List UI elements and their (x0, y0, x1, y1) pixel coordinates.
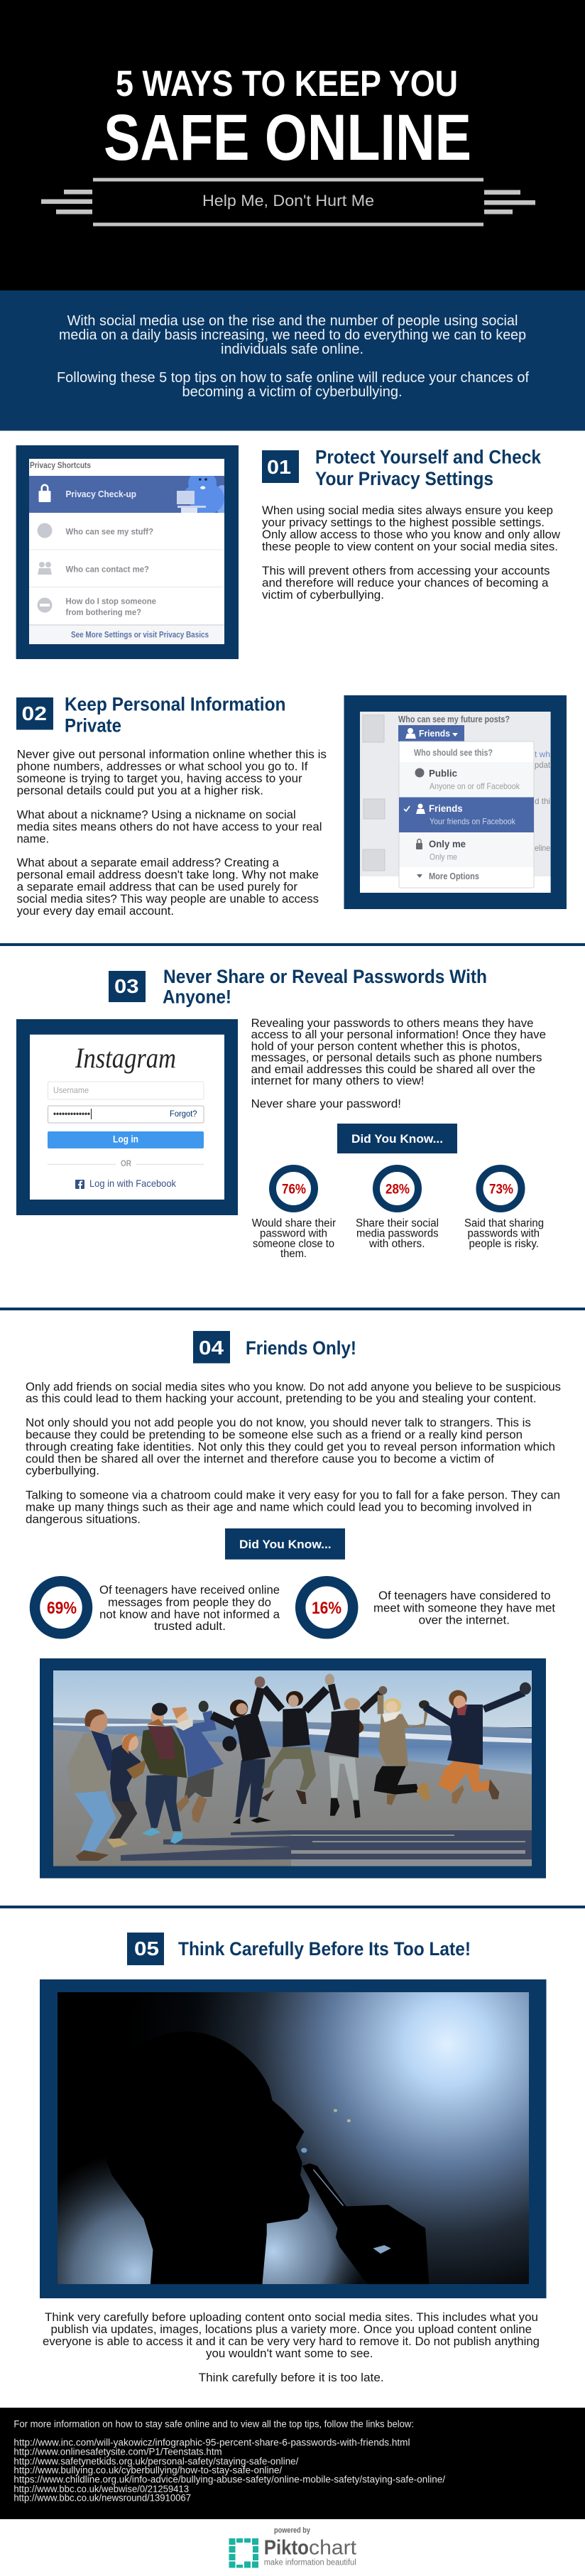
number badge 02: 02 (21, 702, 47, 724)
heading: tip 02: Private (65, 715, 121, 737)
jumping group left half (67, 1676, 282, 1861)
stat: 69%: messages from people they do (108, 1595, 271, 1609)
heading: tip 03 (163, 966, 487, 1008)
title line 2: SAFE ONLINE (104, 102, 471, 174)
did you know label: Did You Know... (351, 1132, 443, 1146)
body text: tip 04: dangerous situations. (26, 1512, 141, 1526)
heading: tip 05: Think Carefully Before Its Too Late! (178, 1938, 471, 1960)
body text: tip 04: because they could be pretending to be someone else such as a friend or a really kind person (26, 1428, 523, 1442)
header banner (0, 0, 585, 290)
body text: tip 02: social media sites? This way people are unable to access (17, 892, 319, 906)
body text: tip 03 (251, 1016, 546, 1110)
stat: 76%: Would share their (252, 1217, 336, 1229)
body text: tip 02: What about a separate email address? Creating a (17, 856, 280, 869)
icon: privacy dinosaur (177, 476, 224, 513)
body text: tip 03: access to all your personal information! Once they have (251, 1028, 546, 1041)
did you know label: Did You Know... (239, 1538, 332, 1551)
body text: tip 02: someone is trying to target you, having access to your (17, 772, 302, 786)
pen and hand (302, 2163, 429, 2284)
panel: instagram login screenshot: OR (121, 1160, 132, 1168)
panel: instagram login screenshot: Log in with Facebook (89, 1178, 177, 1189)
number badge 02 (16, 697, 53, 730)
body text: tip 05: everyone is able to access it and it can be very very hard to remove it. Do not publish anything (43, 2335, 540, 2348)
body text: tip 03: Never share your password! (251, 1097, 401, 1110)
audience menu: Only me (429, 838, 466, 849)
body text: tip 03: and email addresses this could be shared all over the (251, 1063, 535, 1076)
piktochart credit: powered by (274, 2526, 311, 2535)
stat: 69%: 69% (47, 1599, 77, 1618)
audience menu (399, 741, 534, 888)
head silhouette (98, 2031, 310, 2284)
stat: 73%: passwords with (467, 1227, 540, 1240)
body text: tip 01: Only allow access to those who you know and only allow (262, 528, 561, 541)
panel: tip 01 screenshot: from bothering me? (65, 609, 141, 617)
stat: 16%: meet with someone they have met (373, 1601, 555, 1614)
panel: tip 01 screenshot: See More Settings or visit Privacy Basics (71, 631, 209, 640)
icon: no entry (37, 598, 53, 612)
icon: globe (37, 523, 53, 538)
panel: tip 01 screenshot: Privacy Check-up (65, 489, 136, 499)
panel: tip 01 screenshot: Who can see my stuff? (65, 528, 153, 537)
stat: 76%: 76% (282, 1183, 306, 1197)
body text: tip 04: Not only should you not add people you do not know, you should never talk to strangers. This is (26, 1416, 531, 1430)
audience menu: Public (429, 768, 457, 779)
panel: tip 02 screenshot: t wh (535, 749, 550, 759)
piktochart credit: chart (309, 2537, 356, 2560)
logo text: Instagram (75, 1042, 176, 1074)
body text: tip 05: Think very carefully before uploading content onto social media sites. This includes what you (45, 2310, 538, 2324)
source links: http://www.onlinesafetysite.com/P1/Teenstats.htm (13, 2447, 222, 2457)
body text: tip 01: victim of cyberbullying. (262, 588, 384, 602)
piktochart credit: make information beautiful (264, 2559, 356, 2567)
number badge 03: 03 (114, 975, 139, 997)
heading: tip 01: Your Privacy Settings (315, 468, 493, 489)
jumping group right half (261, 1674, 531, 1818)
audience menu: Who should see this? (414, 748, 493, 758)
friends dropdown button: Friends (419, 728, 450, 739)
stat: 16%: Of teenagers have considered to (378, 1589, 551, 1602)
piktochart credit: Pikto (264, 2537, 309, 2560)
beach shadows (121, 1830, 532, 1861)
subtitle: Help Me, Don't Hurt Me (202, 192, 374, 210)
stat: 28%: with others. (368, 1238, 425, 1250)
panel: instagram login screenshot (16, 1019, 238, 1215)
number badge 05 (127, 1933, 164, 1965)
intro text: media on a daily basis increasing, we need to do everything we can to keep (59, 327, 526, 343)
heading: tip 03: Anyone! (163, 987, 231, 1008)
heading: tip 03: Never Share or Reveal Passwords With (163, 966, 487, 987)
heading: tip 02 (65, 694, 285, 737)
body text: tip 03: Revealing your passwords to others means they have (251, 1016, 533, 1030)
stat: 69%: trusted adult. (154, 1619, 226, 1633)
number badge 01: 01 (267, 456, 291, 478)
heading: tip 01: Protect Yourself and Check (315, 446, 542, 467)
body text: tip 05: Think carefully before it is too late. (199, 2371, 384, 2384)
body text: tip 02: phone numbers, addresses or what school you go to. If (17, 760, 308, 773)
photo: friends jumping on a beach (40, 1658, 546, 1879)
stat: 28%: media passwords (356, 1227, 439, 1240)
piktochart credit (229, 2526, 356, 2568)
stat: 73%: Said that sharing (464, 1217, 544, 1229)
heading: tip 02: Keep Personal Information (65, 694, 285, 715)
stat: 16%: over the internet. (419, 1614, 510, 1627)
panel: tip 02 screenshot: eline (535, 843, 550, 853)
body text: tip 02: What about a nickname? Using a nickname on social (17, 808, 296, 821)
audience menu: Friends (429, 803, 463, 814)
password field: Forgot? (170, 1109, 197, 1119)
body text: tip 04: through creating fake identities. Not only this they could get you to reveal person information which (26, 1440, 555, 1453)
number badge 05: 05 (134, 1938, 159, 1960)
body text: tip 01: your privacy settings to the highest possible settings. (262, 516, 545, 529)
panel: tip 02 screenshot: pdat (535, 760, 551, 770)
body text: tip 02: Never give out personal information online whether this is (17, 748, 327, 761)
stat: 76%: password with (260, 1227, 327, 1240)
stat: 69%: Of teenagers have received online (99, 1583, 280, 1597)
did you know label (225, 1528, 345, 1560)
did you know label (337, 1124, 457, 1153)
stat: 76%: them. (280, 1248, 307, 1260)
icon: lock (38, 484, 51, 502)
panel: tip 01 screenshot: Privacy Shortcuts (30, 460, 91, 470)
photo: silhouette with phone (40, 1979, 547, 2298)
source links: https://www.childline.org.uk/info-advice/bullying-abuse-safety/online-mobile-safety/staying-safe-online/ (13, 2474, 445, 2485)
heading: tip 01 (315, 446, 542, 489)
logo mark (229, 2538, 258, 2568)
panel: tip 02 screenshot: d thi (535, 796, 550, 806)
body text: tip 02 (17, 748, 327, 918)
stat: 16%: 16% (312, 1599, 341, 1618)
number badge 04 (193, 1331, 230, 1364)
stat: 16% (300, 1581, 555, 1634)
title line 1: 5 WAYS TO KEEP YOU (116, 63, 458, 104)
body text: tip 05: you wouldn't want some to see. (206, 2347, 373, 2360)
body text: tip 01: When using social media sites always ensure you keep (262, 504, 553, 517)
icon: people (38, 562, 52, 575)
body text: tip 01: This will prevent others from accessing your accounts (262, 564, 550, 577)
source links: http://www.safetynetkids.org.uk/personal-safety/staying-safe-online/ (13, 2456, 299, 2467)
body text: tip 05: publish via updates, images, locations plus a variety more. Once you upload content online (51, 2322, 532, 2336)
body text: tip 04 (26, 1380, 561, 1526)
body text: tip 02: media sites means others do not have access to your real (17, 820, 322, 834)
number badge 03 (109, 971, 146, 1002)
intro text (57, 313, 529, 400)
heading: tip 04: Friends Only! (246, 1337, 356, 1359)
body text: tip 02: name. (17, 832, 49, 845)
subtitle ribbon (41, 178, 535, 226)
stat: 28%: 28% (386, 1183, 410, 1197)
intro panel (0, 290, 585, 430)
body text: tip 02: personal details could put you at a higher risk. (17, 784, 263, 798)
body text: tip 03: hold of your person content whether this is photos, (251, 1039, 520, 1053)
body text: tip 03: internet for many others to view! (251, 1074, 425, 1087)
icon: facebook (75, 1180, 84, 1189)
body text: tip 02: your every day email account. (17, 904, 174, 918)
source links: http://www.bbc.co.uk/webwise/0/21259413 (13, 2484, 189, 2494)
intro text: Following these 5 top tips on how to safe online will reduce your chances of (57, 370, 529, 386)
body text: tip 04: as this could lead to them hacking your account, pretending to be you and stealing your content. (26, 1392, 537, 1406)
body text: tip 04: cyberbullying. (26, 1464, 99, 1477)
body text: tip 04: Talking to someone via a chatroom could make it very easy for you to fall for a fake person. They can (26, 1489, 560, 1502)
friends dropdown button (398, 725, 464, 741)
log in button (48, 1131, 204, 1148)
body text: tip 04: could then be shared all over the internet and therefore cause you to become a victim of (26, 1452, 494, 1465)
stat: 28% (356, 1168, 439, 1250)
log in button: Log in (113, 1134, 138, 1145)
number badge 04: 04 (199, 1337, 224, 1359)
panel: tip 01 screenshot: How do I stop someone (65, 598, 156, 607)
panel: tip 02 screenshot: Who can see my future posts? (398, 714, 510, 724)
body text: tip 02: personal email address doesn't take long. Why not make (17, 868, 319, 881)
body text: tip 02: a separate email address that can be used purely for (17, 880, 297, 893)
body text: tip 04: make up many things such as their age and name which could lead you to becoming involved in (26, 1500, 532, 1514)
stat: 73%: 73% (489, 1183, 513, 1197)
body text: tip 01 (262, 504, 561, 602)
password field (48, 1106, 204, 1123)
body text: tip 04: Only add friends on social media sites who you know. Do not add anyone you believe to be suspicious (26, 1380, 561, 1393)
stat: 73% (464, 1168, 544, 1250)
panel: tip 01 screenshot (16, 445, 239, 659)
body text: tip 03: messages, or personal details such as phone numbers (251, 1051, 542, 1065)
body text: tip 01: these people to view content on your social media sites. (262, 540, 558, 553)
stat: 69% (35, 1581, 280, 1634)
number badge 01 (262, 450, 299, 483)
body text: tip 01: and therefore will reduce your chances of becoming a (262, 576, 549, 589)
intro text: With social media use on the rise and the number of people using social (67, 313, 518, 329)
audience menu: Anyone on or off Facebook (430, 781, 520, 791)
panel: tip 02 screenshot (344, 695, 567, 909)
source links: http://www.bbc.co.uk/newsround/13910067 (13, 2493, 191, 2503)
stat: 76% (252, 1168, 336, 1260)
stat: 73%: people is risky. (469, 1238, 539, 1250)
source links (13, 2438, 445, 2503)
intro text: becoming a victim of cyberbullying. (182, 384, 402, 400)
intro text: individuals safe online. (221, 342, 363, 357)
password field: ••••••••••••• (53, 1109, 90, 1119)
footer: sources (0, 2408, 585, 2519)
audience menu: Only me (430, 852, 457, 862)
username field: Username (53, 1085, 89, 1095)
footer: sources: For more information on how to stay safe online and to view all the top tips, follow the links below: (13, 2419, 414, 2430)
source links: http://www.inc.com/will-yakowicz/infographic-95-percent-share-6-passwords-with-friends.html (13, 2438, 410, 2447)
source links: http://www.bullying.co.uk/cyberbullying/how-to-stay-safe-online/ (13, 2464, 283, 2476)
stat: 28%: Share their social (356, 1217, 439, 1229)
username field (48, 1082, 204, 1099)
panel: tip 01 screenshot: Who can contact me? (65, 566, 149, 575)
audience menu: Your friends on Facebook (430, 817, 516, 827)
audience menu: More Options (429, 871, 479, 881)
stat: 76%: someone close to (253, 1238, 334, 1250)
stat: 69%: not know and have not informed a (99, 1608, 280, 1621)
body text: tip 05 (43, 2310, 540, 2384)
